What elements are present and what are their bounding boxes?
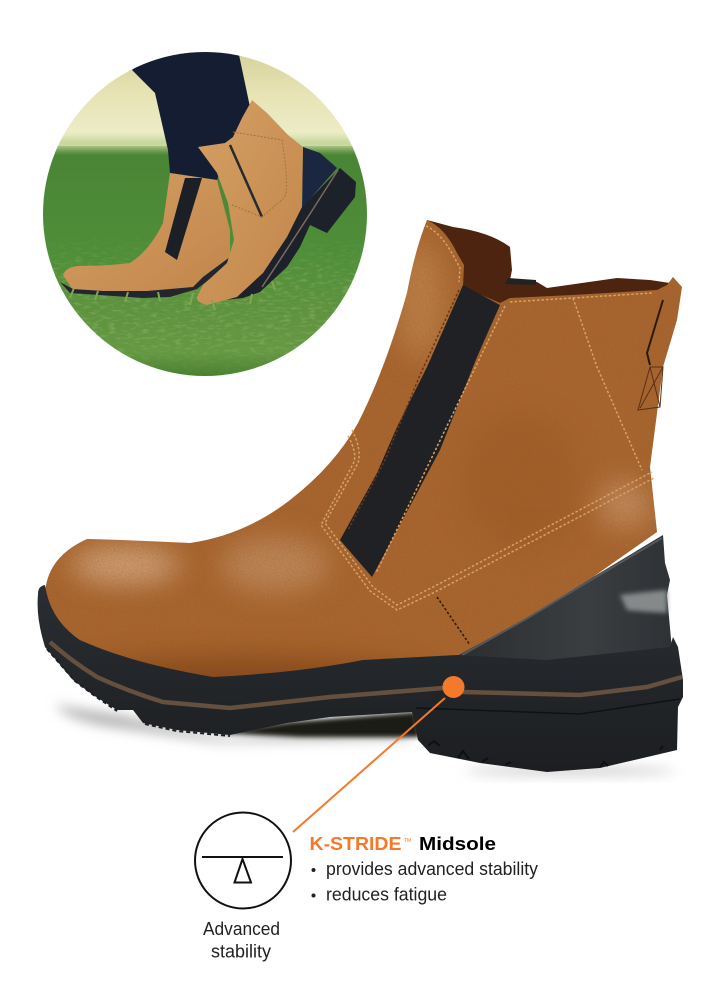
blurred background — [43, 52, 367, 152]
rear boot elastic gore — [165, 178, 202, 260]
outsole and midsole — [38, 585, 683, 772]
leather grain — [40, 215, 690, 685]
heel reflective highlight — [620, 590, 667, 613]
ground shadow — [55, 705, 410, 742]
feature bullet list — [312, 859, 538, 904]
boot lining — [427, 220, 670, 312]
icon: advanced stability seesaw — [195, 812, 291, 908]
front boot sole — [225, 168, 356, 300]
toe highlight — [70, 547, 180, 583]
rear lower highlight — [597, 481, 653, 529]
grass texture — [48, 248, 358, 362]
stitching — [321, 226, 654, 645]
heel shadow — [465, 767, 675, 775]
heading: TM — [404, 838, 411, 844]
heel counter — [457, 535, 672, 664]
shaft highlight — [395, 240, 445, 360]
feature bullet list: reduces fatigue — [326, 884, 447, 904]
callout line — [293, 698, 445, 832]
vamp highlight — [220, 537, 330, 593]
rear boot sole — [60, 257, 230, 298]
grass blades over soles — [70, 281, 275, 310]
front boot upper — [197, 100, 303, 305]
lifestyle photo circle: boots on grass — [30, 50, 380, 381]
rear panel shade — [460, 410, 580, 550]
sole contact shadow — [215, 712, 420, 737]
midsole brown stripe — [50, 642, 682, 708]
midsole lower line — [416, 699, 680, 714]
rear boot — [63, 173, 230, 292]
side label — [638, 367, 663, 410]
heading: Midsole — [419, 834, 496, 854]
callout dot — [442, 676, 464, 698]
main boot — [38, 215, 690, 775]
front boot sole stripe — [262, 170, 338, 287]
icon caption: Advanced — [203, 919, 280, 939]
toe tread teeth — [47, 649, 230, 736]
upper base — [40, 215, 690, 685]
heading: K-STRIDE — [310, 834, 402, 854]
heel counter rim — [462, 538, 662, 655]
front boot stitching — [232, 132, 287, 217]
heel tread notches — [428, 741, 663, 767]
grass — [30, 146, 380, 381]
elastic gore — [340, 285, 500, 577]
leather upper — [40, 215, 690, 702]
leg in navy breeches — [132, 50, 250, 180]
zipper pull — [505, 278, 536, 285]
pull tab gap — [647, 300, 663, 365]
feature bullet list: provides advanced stability — [326, 859, 538, 879]
front boot zipper — [230, 145, 262, 217]
vamp lower shade — [115, 647, 400, 677]
icon caption: stability — [211, 942, 271, 962]
horizon blur band — [30, 138, 380, 149]
icon caption — [203, 919, 280, 962]
front boot heel counter — [302, 147, 337, 208]
